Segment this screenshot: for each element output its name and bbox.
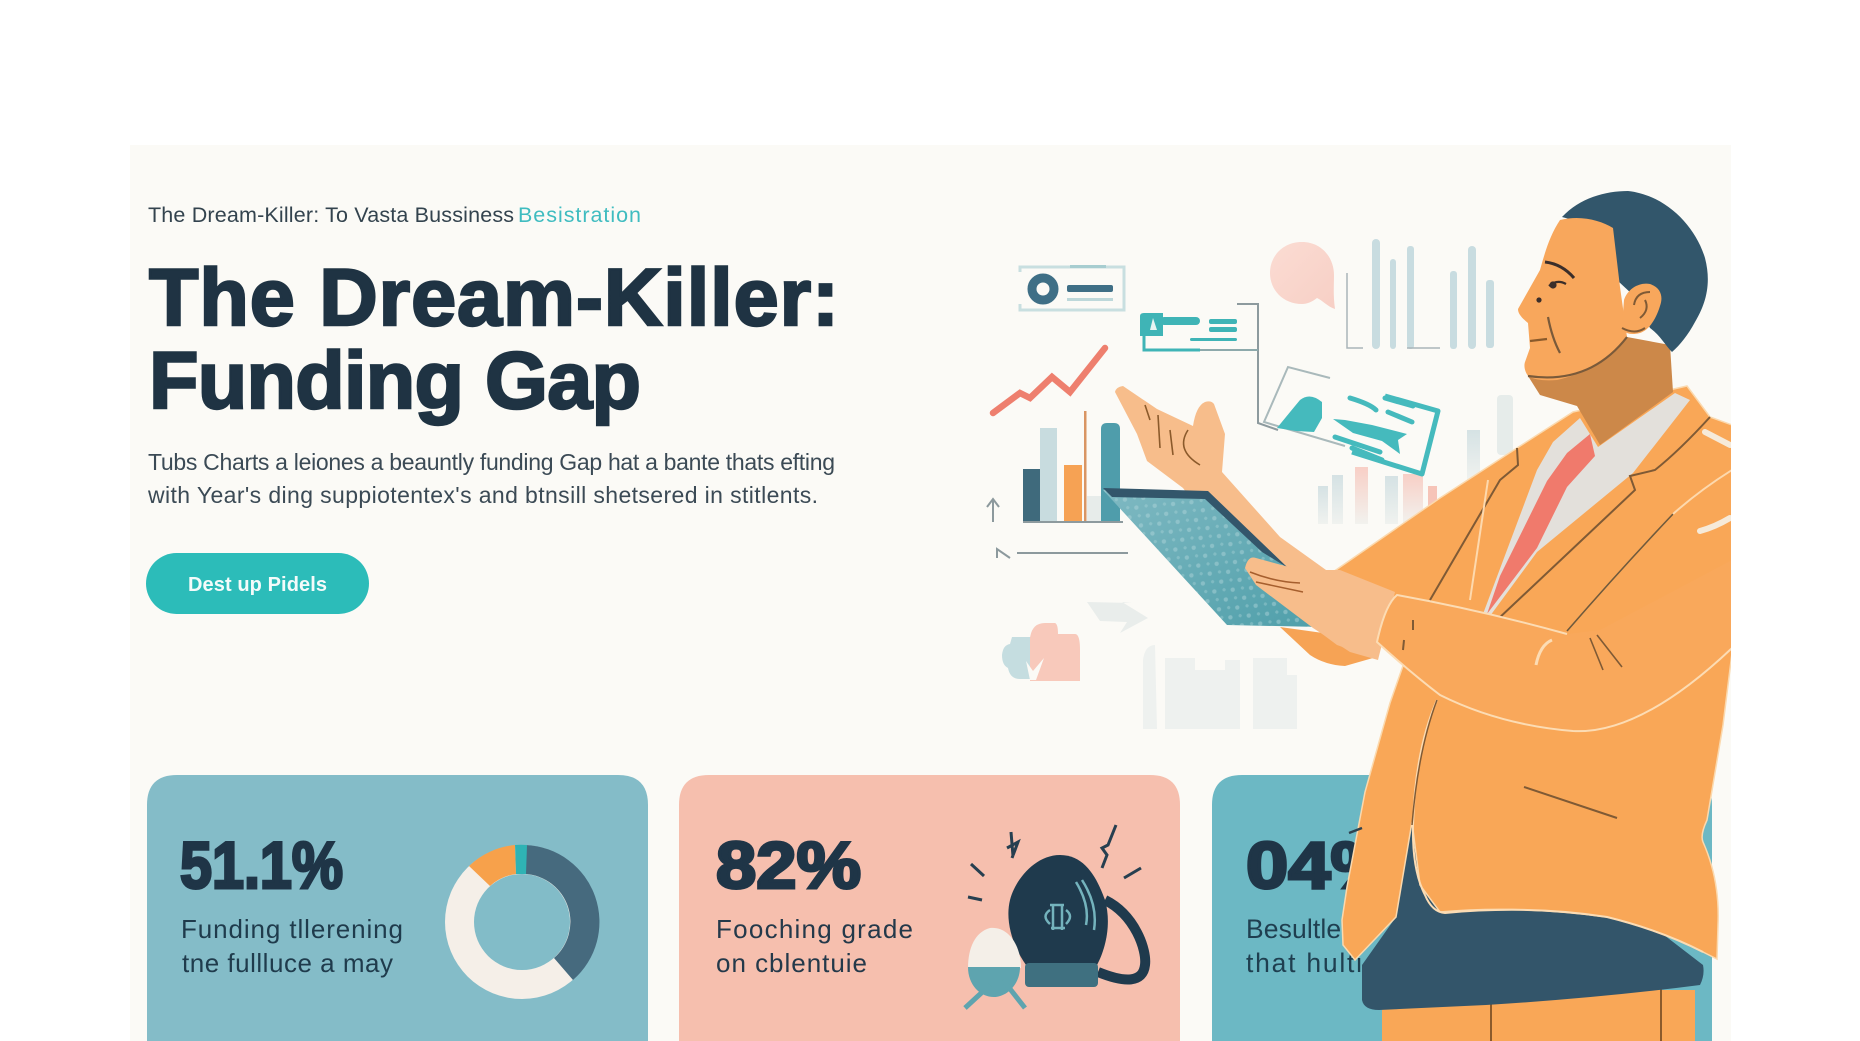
title: Funding Gap — [149, 336, 641, 426]
tie — [1487, 434, 1595, 614]
neck — [1528, 337, 1673, 445]
stat value 82%: 82% — [716, 828, 861, 902]
forearm and fingers — [1245, 557, 1395, 660]
raised arm and hand — [1115, 386, 1342, 647]
donut chart — [445, 845, 599, 999]
faint building shapes — [1143, 645, 1297, 729]
person illustration — [1103, 191, 1732, 1041]
panel: stat card 3 — [1212, 775, 1712, 1041]
small arrows and axis line — [987, 499, 1128, 558]
body text: with Year's ding suppiotentex's and btnsill shetsered in stitlents. — [147, 482, 818, 508]
icon: burst bulb — [965, 825, 1145, 1008]
title — [149, 253, 839, 426]
stat description: tne fullluce a may — [182, 948, 393, 978]
jacket sleeve — [1376, 594, 1731, 732]
face — [1518, 218, 1627, 380]
trousers — [1382, 985, 1695, 1041]
faint background bars — [1318, 395, 1513, 524]
button: Dest up Pidels — [188, 574, 327, 596]
egg and stand — [968, 928, 1021, 968]
chart: tall light bars — [1347, 239, 1494, 349]
chart: colored bars — [1023, 411, 1123, 523]
title: The Dream-Killer: — [149, 253, 839, 343]
body text: Tubs Charts a leiones a beauntly funding Gap hat a bante thats efting — [148, 449, 835, 475]
stat description: that hulti — [1246, 948, 1362, 978]
button — [146, 553, 369, 614]
jacket front edge — [1349, 700, 1703, 952]
sparks — [968, 825, 1141, 900]
stat description — [716, 914, 913, 978]
back sleeve — [1280, 627, 1373, 666]
eyebrow text: Besistration — [518, 203, 641, 227]
stat description: on cblentuie — [716, 948, 867, 978]
jacket — [1333, 386, 1732, 960]
shirt — [1483, 393, 1690, 616]
chart: red trend line — [993, 348, 1105, 413]
small data card — [1016, 265, 1124, 310]
stat value 04%: 04% — [1246, 828, 1398, 902]
panel: stat card 1 — [147, 775, 648, 1041]
tablet — [1103, 488, 1320, 627]
stat description — [1246, 914, 1362, 978]
panel: stat card 2 — [679, 775, 1180, 1041]
skewed teal card — [1264, 367, 1438, 474]
ear — [1622, 284, 1661, 334]
stat description: Fooching grade — [716, 914, 913, 944]
puzzle icon — [1002, 623, 1080, 681]
jacket lapels and seams — [1430, 417, 1710, 818]
palm creases — [1145, 405, 1200, 465]
teal data card with connector — [1140, 304, 1278, 430]
eyebrow text: The Dream-Killer: To Vasta Bussiness — [148, 203, 514, 227]
background panel — [130, 145, 1731, 1041]
icon: speech bubble — [1270, 242, 1335, 309]
stat description: Funding tllerening — [181, 914, 403, 944]
stat description: Besultler — [1246, 914, 1350, 944]
faint arrow — [1087, 602, 1148, 633]
dark shirt hem — [1362, 820, 1704, 1010]
body text — [147, 449, 835, 508]
hair — [1562, 191, 1708, 352]
stat value 51.1%: 51.1% — [180, 828, 343, 902]
facial features — [1528, 262, 1627, 377]
stat description — [181, 914, 403, 978]
